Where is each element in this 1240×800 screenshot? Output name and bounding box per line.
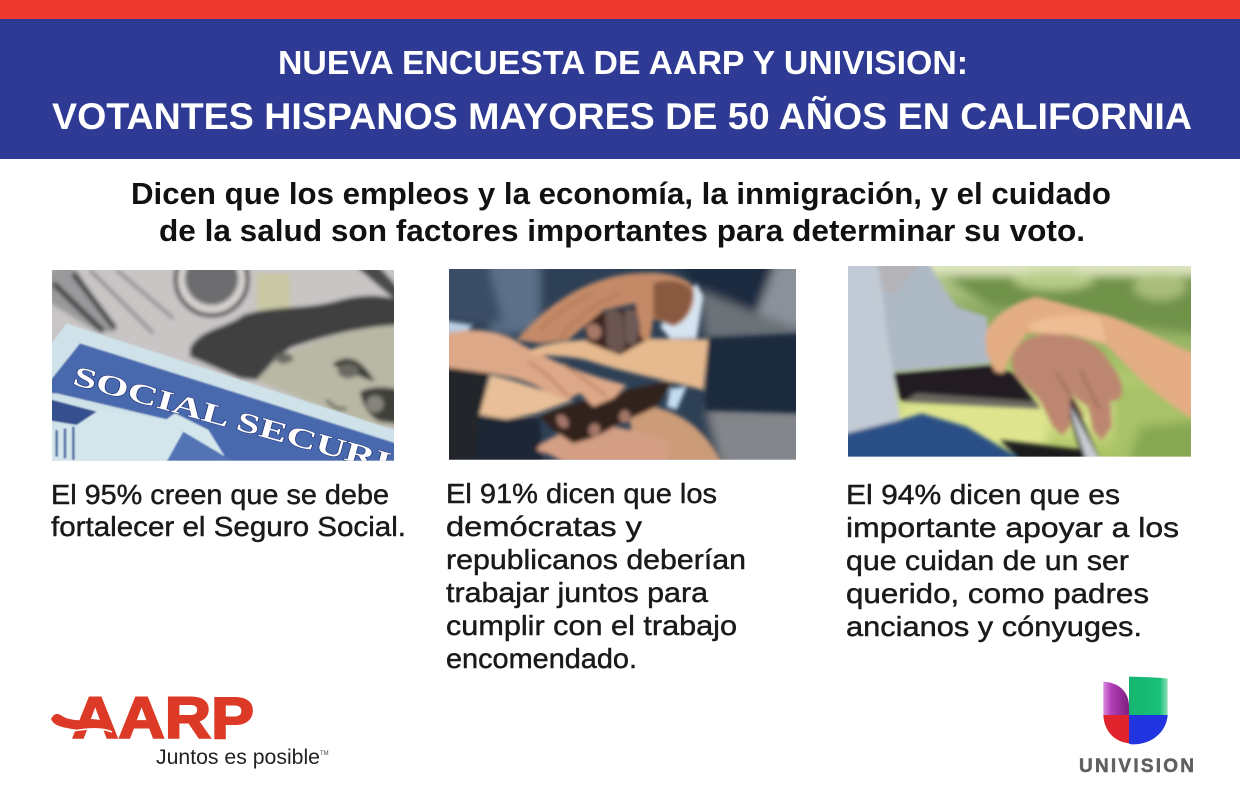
text: 91%: trabajar juntos para	[446, 577, 708, 608]
top red stripe	[0, 0, 1240, 19]
icon: AARP swoosh	[51, 714, 112, 732]
subtitle: Dicen que los empleos y la economía, la inmigración, y el cuidado	[131, 176, 1111, 211]
panel: social security	[51, 270, 404, 542]
title line 1: NUEVA ENCUESTA DE AARP Y UNIVISION:	[278, 44, 968, 81]
subtitle: de la salud son factores importantes para determinar su voto.	[159, 213, 1085, 248]
header banner	[0, 19, 1240, 159]
text: 95%: fortalecer el Seguro Social.	[51, 511, 406, 542]
panel: caregivers	[840, 260, 1207, 642]
photo: stacked hands	[449, 269, 796, 460]
trademark: TM	[320, 751, 329, 757]
logo: Univision	[1079, 677, 1194, 777]
photo: hand on a wheelchair user's hand	[848, 266, 1191, 457]
text: 95%	[51, 479, 406, 542]
text: 91%: demócratas y	[446, 511, 642, 542]
text: 91%: cumplir con el trabajo	[446, 610, 737, 641]
wordmark: UNIVISION	[1079, 756, 1194, 777]
text: 91%: El 91% dicen que los	[446, 478, 717, 509]
text: 91%: encomendado.	[446, 643, 637, 674]
tagline: Juntos es posible	[156, 746, 320, 769]
text: 91%: republicanos deberían	[446, 544, 746, 575]
logo: AARP	[51, 686, 329, 769]
AARP wordmark: AARP	[72, 686, 254, 751]
text: 94%: que cuidan de un ser	[846, 545, 1129, 576]
text: 94%	[846, 479, 1179, 642]
title line 2: VOTANTES HISPANOS MAYORES DE 50 AÑOS EN CALIFORNIA	[52, 95, 1192, 137]
photo text: social security: SOCIAL SECURI	[70, 361, 394, 478]
text: 94%: importante apoyar a los	[846, 512, 1179, 543]
subtitle	[131, 176, 1111, 248]
icon: Univision U	[1103, 677, 1168, 744]
panel: working together	[446, 269, 796, 668]
photo: social security card on a dollar bill	[52, 270, 394, 461]
text: 91%	[446, 478, 746, 674]
text: 95%: El 95% creen que se debe	[51, 479, 389, 510]
text: 94%: El 94% dicen que es	[846, 479, 1120, 510]
text: 94%: querido, como padres	[846, 578, 1149, 609]
text: 94%: ancianos y cónyuges.	[846, 611, 1142, 642]
